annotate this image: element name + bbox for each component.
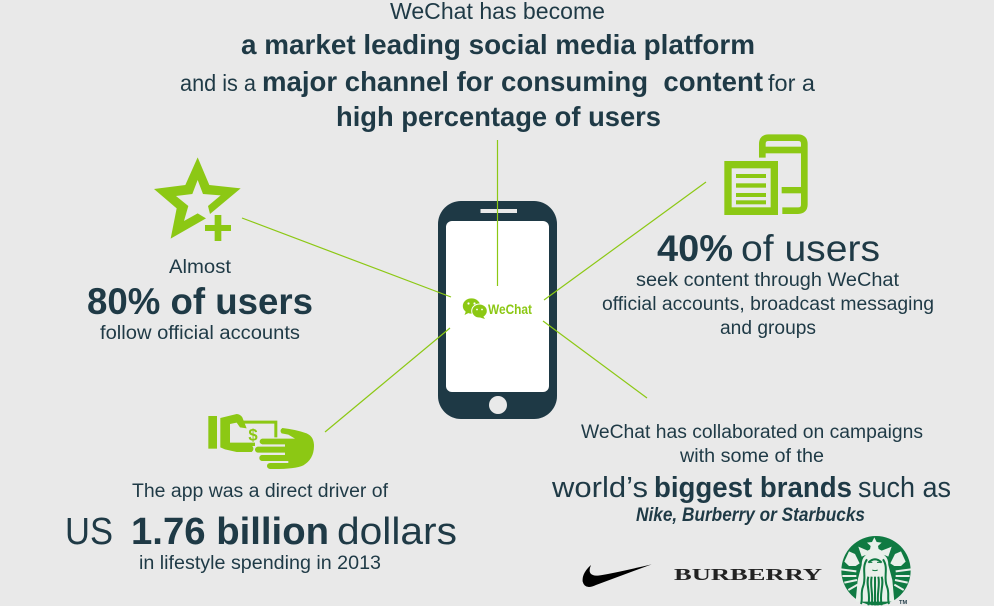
title <box>180 0 815 132</box>
icon: WeChat logo: WeChat <box>488 302 532 317</box>
title: for a <box>768 70 815 96</box>
panel: 40% of users: official accounts, broadcast messaging <box>602 294 934 315</box>
logo: Nike swoosh <box>583 564 652 587</box>
icon: WeChat logo <box>463 298 532 319</box>
connector lines <box>242 140 706 432</box>
panel: 80% of users: 80% of users <box>87 281 313 322</box>
panel: biggest brands: Nike, Burberry or Starbucks <box>636 505 865 526</box>
phone illustration <box>438 201 557 419</box>
panel: 1.76 billion dollars <box>65 481 457 574</box>
panel: biggest brands: WeChat has collaborated on campaigns <box>581 422 923 443</box>
panel: 80% of users: follow official accounts <box>100 323 300 344</box>
panel: 40% of users: and groups <box>720 318 816 339</box>
panel: 1.76 billion dollars: US <box>65 511 113 553</box>
title: and is a <box>180 70 256 96</box>
panel: 80% of users: Almost <box>169 257 232 278</box>
logo: Burberry: BURBERRY <box>674 565 822 584</box>
panel: biggest brands: such as <box>858 472 951 504</box>
panel: biggest brands <box>551 422 951 526</box>
panel: 1.76 billion dollars: The app was a direct driver of <box>132 481 389 502</box>
panel: biggest brands: biggest brands <box>654 472 852 504</box>
panel: 40% of users: 40% <box>657 228 733 269</box>
panel: 40% of users <box>602 228 934 339</box>
icon: hands exchanging money <box>208 414 314 469</box>
panel: 80% of users <box>87 257 313 344</box>
icon: star with plus <box>154 157 241 241</box>
logo: Starbucks <box>841 536 911 606</box>
panel: 40% of users: seek content through WeChat <box>636 270 900 291</box>
title: a market leading social media platform <box>241 29 755 60</box>
title: high percentage of users <box>336 101 661 132</box>
panel: 1.76 billion dollars: dollars <box>337 511 457 553</box>
panel: biggest brands: with some of the <box>679 446 824 467</box>
title: major channel for consuming content <box>262 66 763 97</box>
panel: biggest brands: world’s <box>551 472 648 504</box>
icon: document and phone <box>724 138 804 215</box>
panel: 40% of users: of users <box>741 228 880 269</box>
panel: 1.76 billion dollars: 1.76 billion <box>131 511 329 553</box>
icon: hands exchanging money: $ <box>248 426 258 445</box>
panel: 1.76 billion dollars: in lifestyle spending in 2013 <box>139 553 381 574</box>
logo: Starbucks: TM <box>899 600 907 606</box>
